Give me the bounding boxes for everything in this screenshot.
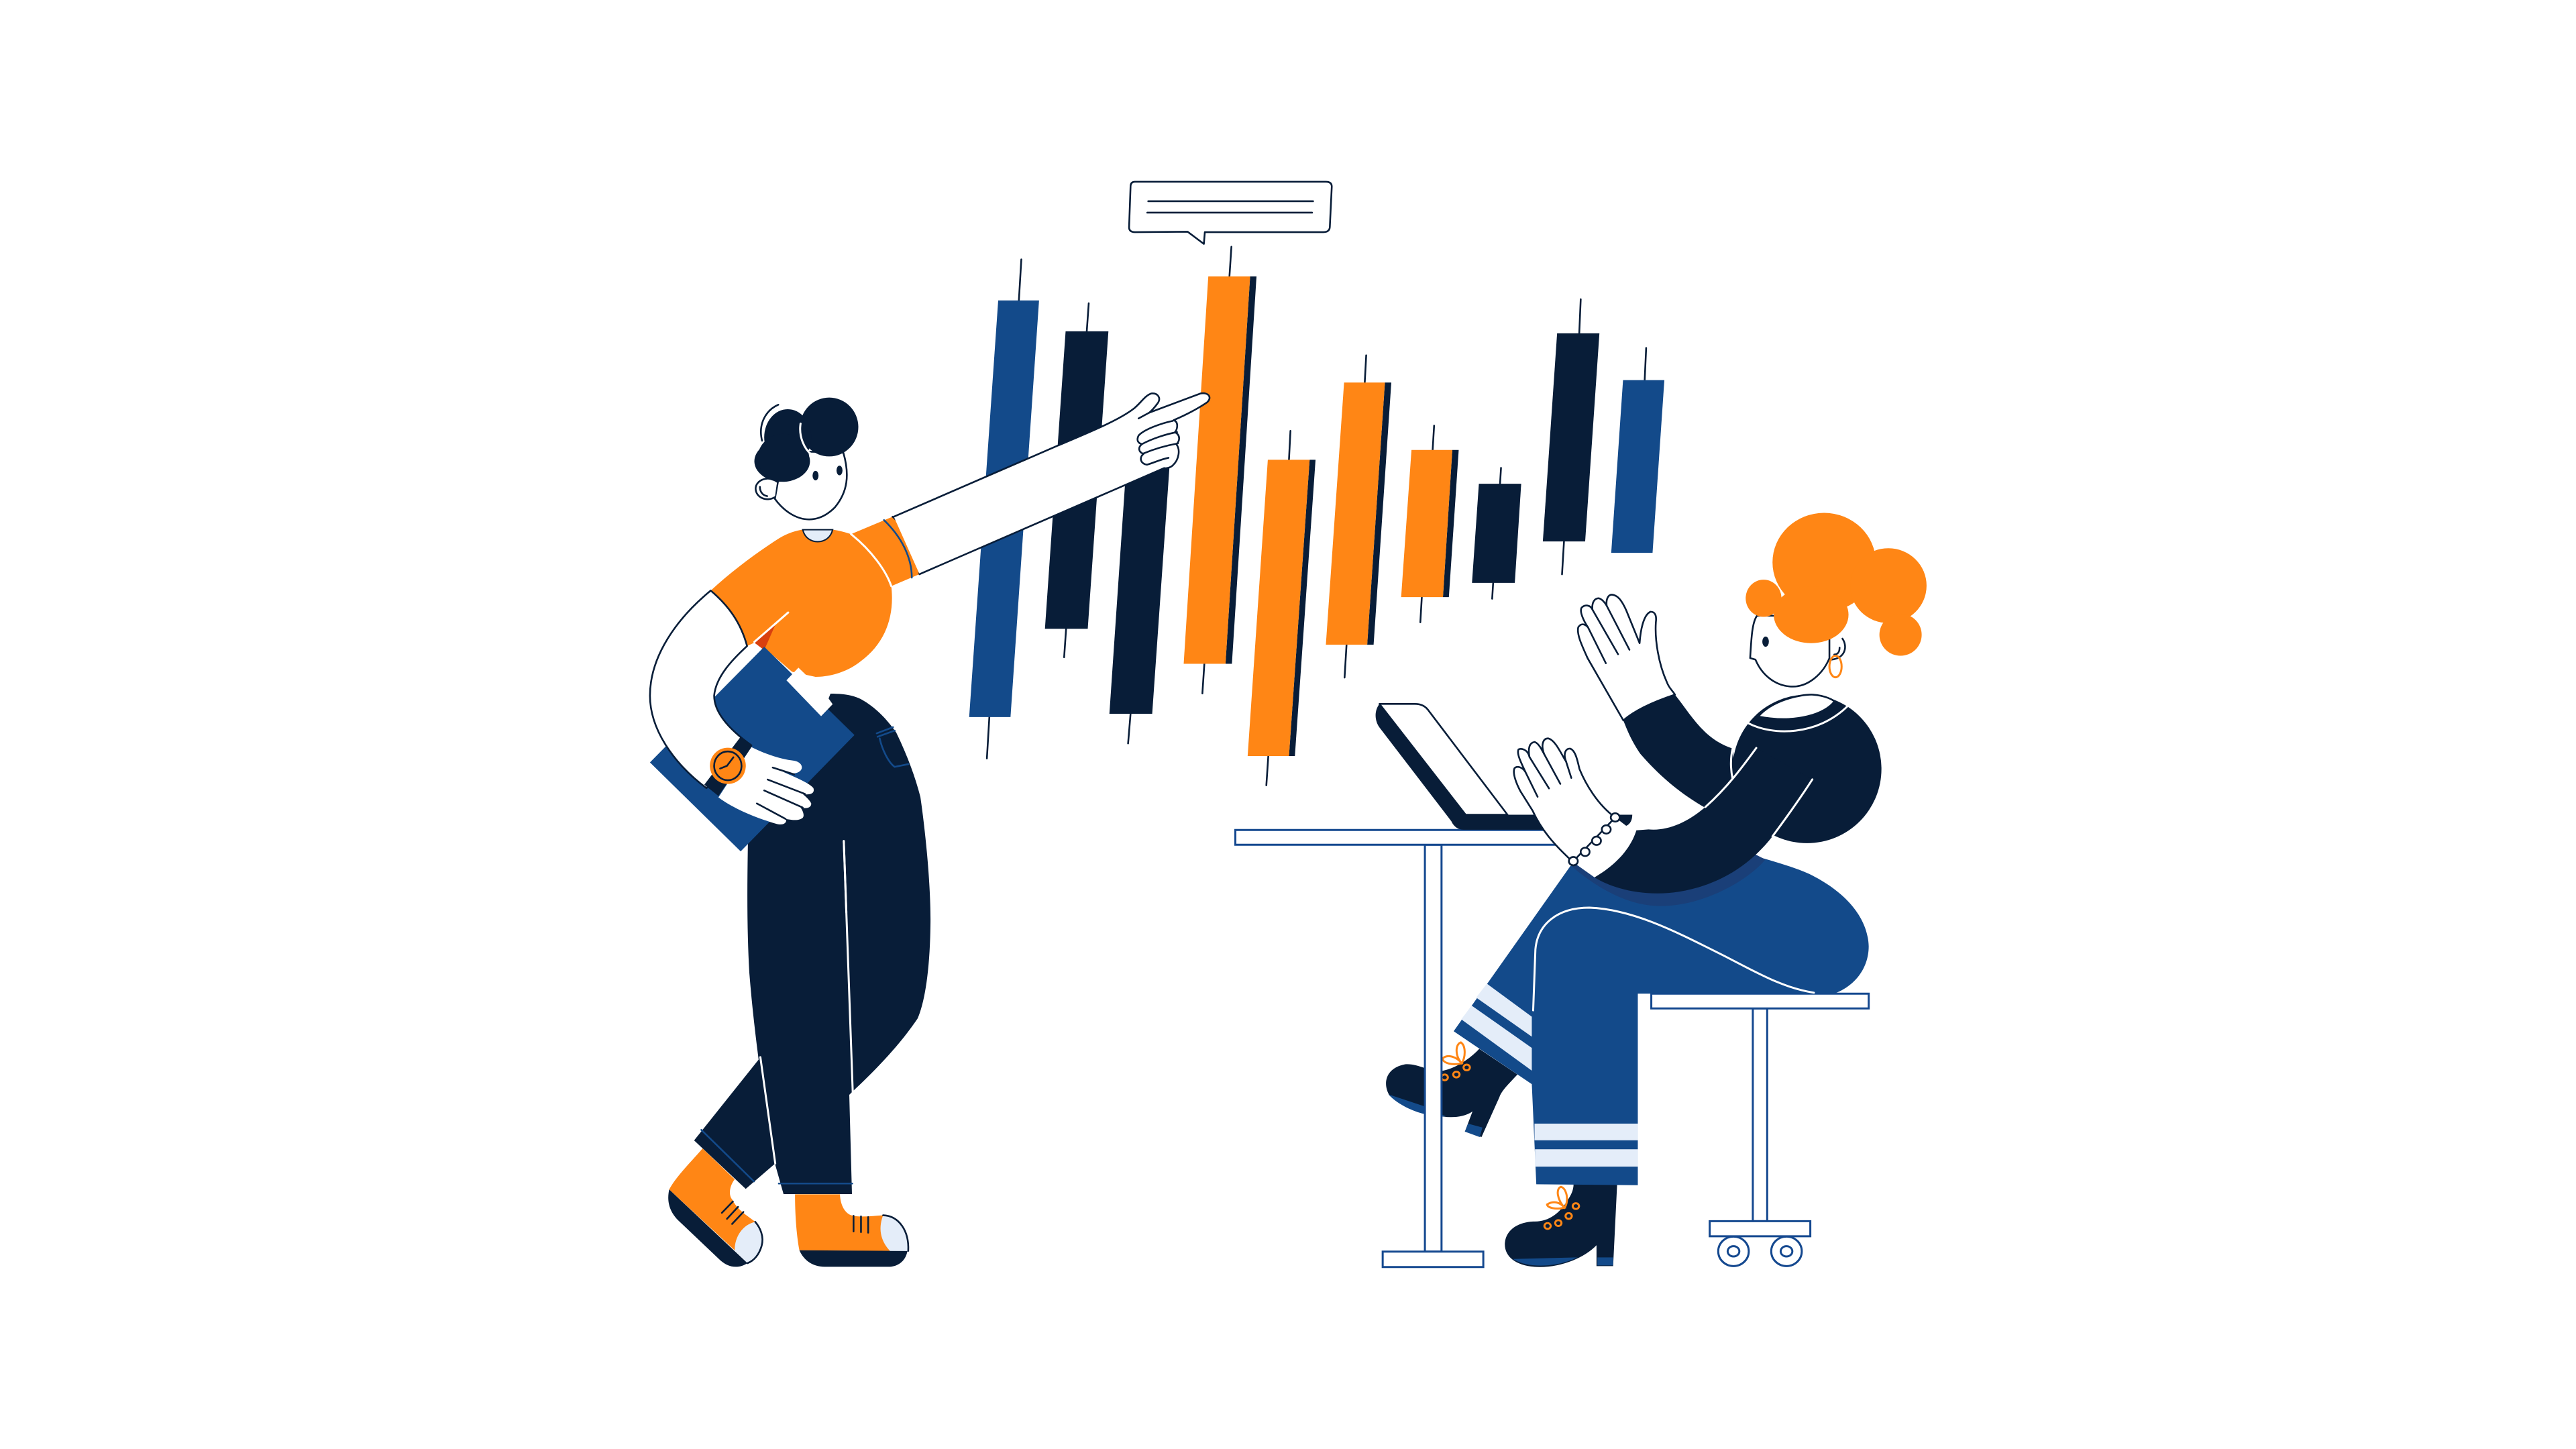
- pocket: [877, 727, 908, 767]
- candle 7 orange: [1401, 425, 1458, 623]
- woman's trousers and near boot: [1454, 850, 1869, 1267]
- man standing: [650, 393, 1210, 1267]
- man's legs and shoes: [668, 841, 908, 1267]
- watch band: [704, 737, 752, 796]
- front shoe: [795, 1194, 908, 1267]
- clip: [786, 667, 833, 716]
- raised arm sleeve: [1623, 695, 1736, 808]
- candle 6 orange: [1326, 356, 1391, 678]
- candle 9 navy: [1543, 299, 1599, 574]
- man's hair: [755, 398, 858, 482]
- collar: [1758, 694, 1834, 719]
- speech bubble: [1129, 182, 1332, 244]
- front arm sleeve: [1595, 748, 1813, 894]
- back shoe: [668, 1148, 763, 1267]
- lower hand: [1514, 739, 1636, 877]
- man's trousers: [747, 694, 930, 1194]
- hand on hip: [718, 747, 814, 824]
- candle 1 blue: [969, 260, 1039, 759]
- candle 3 navy: [1110, 453, 1171, 743]
- stool: [1652, 994, 1869, 1266]
- pointing arm: [894, 393, 1210, 574]
- candle 10 blue: [1611, 348, 1664, 553]
- pocket crease: [844, 841, 847, 912]
- shirt: [710, 517, 920, 677]
- torso: [1733, 695, 1882, 843]
- desk: [1236, 830, 1559, 1267]
- laptop: [1376, 704, 1632, 830]
- clipboard: [650, 647, 855, 851]
- ear and earring: [1831, 639, 1845, 659]
- watch: [710, 748, 746, 784]
- man's upper body: [650, 393, 1210, 912]
- bracelet: [1569, 813, 1619, 865]
- candlestick chart: [969, 247, 1664, 786]
- woman's far boot: [1386, 1042, 1517, 1137]
- candle 2 navy: [1045, 303, 1108, 657]
- man's face: [775, 451, 847, 519]
- woman's torso, head and arms: [1514, 513, 1927, 894]
- collar: [803, 530, 833, 541]
- candle 4 orange: [1183, 247, 1256, 694]
- face: [1750, 616, 1829, 686]
- raised hand: [1578, 594, 1675, 720]
- candle 8 navy: [1472, 468, 1521, 599]
- bent arm: [650, 590, 751, 788]
- man's ear: [755, 478, 777, 499]
- woman seated: [1454, 513, 1927, 1267]
- hair: [1746, 513, 1927, 655]
- man's eyes: [812, 466, 843, 480]
- candle 5 orange: [1248, 431, 1316, 786]
